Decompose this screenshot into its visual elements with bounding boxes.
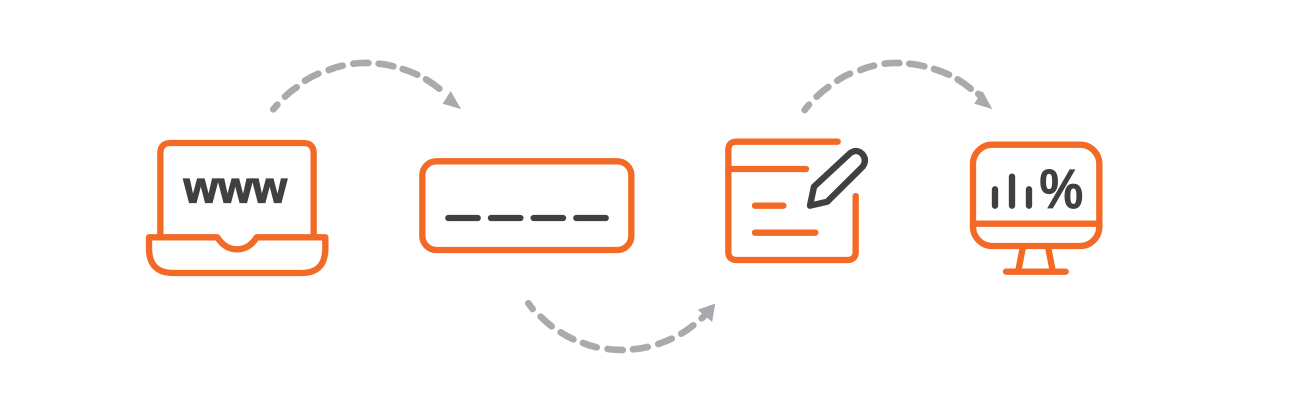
- form header line: [728, 159, 806, 178]
- arrow: form to monitor: [805, 63, 991, 110]
- monitor divider: [973, 214, 1099, 233]
- arrow: laptop to input box: [273, 63, 460, 109]
- arrow: input box to form: [528, 303, 714, 350]
- icon: laptop with www: [149, 143, 325, 273]
- input box outline: [422, 161, 631, 250]
- monitor stand: [1006, 248, 1066, 272]
- icon: form with pencil: [728, 142, 865, 260]
- laptop screen: [160, 143, 314, 237]
- bar chart: [995, 177, 1029, 206]
- form text lines: [755, 206, 815, 233]
- icon: monitor with chart and percent: [973, 145, 1099, 272]
- laptop base: [149, 237, 325, 273]
- blank dashes: [448, 208, 606, 227]
- icon: input box with blank dashes: [422, 161, 631, 250]
- www label: www: [183, 164, 288, 213]
- pencil: [810, 151, 865, 206]
- percent sign: %: [1039, 158, 1083, 221]
- monitor frame: [973, 145, 1099, 246]
- form outline: [728, 142, 856, 260]
